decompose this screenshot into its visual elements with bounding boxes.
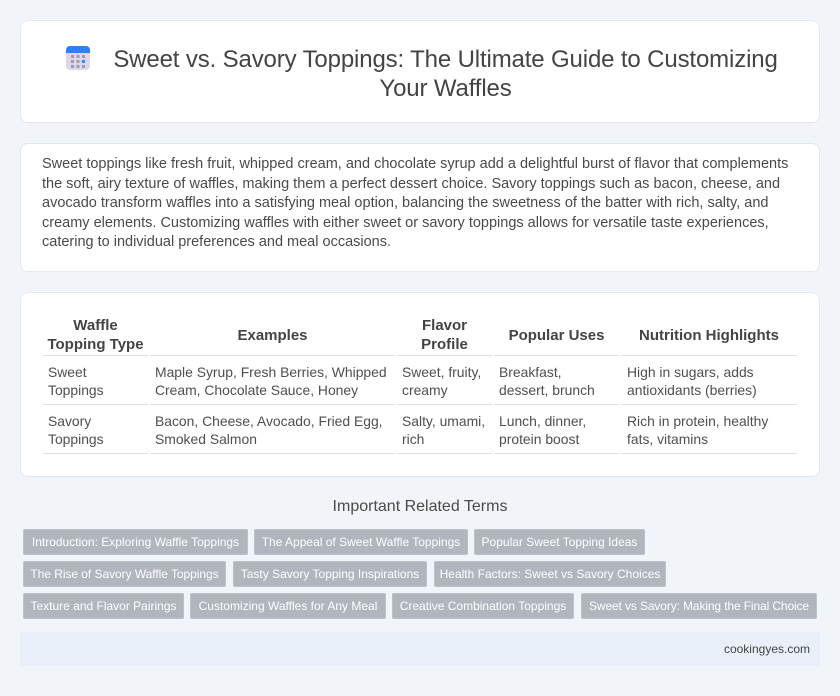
related terms tags: Sweet vs Savory: Making the Final Choice [589,599,809,613]
icon: calendar [66,46,90,70]
related terms tags: Texture and Flavor Pairings [30,599,177,613]
comparison table: Salty, umami, [402,413,485,429]
intro text: catering to individual preferences and meal occasions. [42,234,391,250]
title [113,46,778,102]
comparison table: Toppings [48,431,104,447]
comparison table: Waffle [73,317,118,334]
comparison table: antioxidants (berries) [627,382,757,398]
related terms tags: Creative Combination Toppings [400,599,566,613]
comparison table: Flavor [422,317,467,334]
header panel [20,20,820,123]
intro text [42,156,788,250]
table panel [20,292,820,477]
intro text: the soft, airy texture of waffles, making them a perfect dessert choice. Savory toppings such as bacon, cheese, and [42,176,780,192]
comparison table: Breakfast, [499,364,562,380]
related terms tags: Customizing Waffles for Any Meal [199,599,377,613]
comparison table: Examples [237,327,308,344]
comparison table: fats, vitamins [627,431,708,447]
comparison table: Rich in protein, healthy [627,413,768,429]
intro panel [20,143,820,272]
comparison table: Sweet [48,364,87,380]
comparison table: Bacon, Cheese, Avocado, Fried Egg, [155,413,383,429]
comparison table: Lunch, dinner, [499,413,586,429]
comparison table [43,317,797,454]
related terms tags: The Appeal of Sweet Waffle Toppings [262,535,460,549]
comparison table: rich [402,431,424,447]
related terms tags: Popular Sweet Topping Ideas [482,535,637,549]
footer [20,632,820,666]
comparison table: Toppings [48,382,104,398]
comparison table: Maple Syrup, Fresh Berries, Whipped [155,364,387,380]
comparison table: Profile [421,336,468,353]
comparison table: dessert, brunch [499,382,595,398]
related terms tags: Introduction: Exploring Waffle Toppings [32,535,239,549]
comparison table: Savory [48,413,91,429]
title: Your Waffles [379,75,512,102]
comparison table: Cream, Chocolate Sauce, Honey [155,382,358,398]
title: Sweet vs. Savory Toppings: The Ultimate Guide to Customizing [113,46,778,73]
comparison table: Nutrition Highlights [639,327,779,344]
related terms tags: Tasty Savory Topping Inspirations [241,567,419,581]
comparison table: protein boost [499,431,579,447]
comparison table: High in sugars, adds [627,364,754,380]
comparison table: Sweet, fruity, [402,364,481,380]
related terms heading: Important Related Terms [333,498,507,515]
comparison table: Smoked Salmon [155,431,257,447]
related terms tags: The Rise of Savory Waffle Toppings [30,567,219,581]
related terms tags: Health Factors: Sweet vs Savory Choices [440,567,660,581]
footer source text: cookingyes.com [724,642,810,656]
intro text: avocado transform waffles into a satisfying meal option, balancing the sweetness of the batter with rich, salty, and [42,195,768,211]
comparison table: creamy [402,382,448,398]
comparison table: Topping Type [47,336,144,353]
intro text: Sweet toppings like fresh fruit, whipped cream, and chocolate syrup add a delightful burst of flavor that complements [42,156,788,172]
intro text: creamy elements. Customizing waffles with either sweet or savory toppings allows for versatile taste experiences, [42,214,769,230]
comparison table: Popular Uses [509,327,604,344]
related terms tags [23,529,817,619]
